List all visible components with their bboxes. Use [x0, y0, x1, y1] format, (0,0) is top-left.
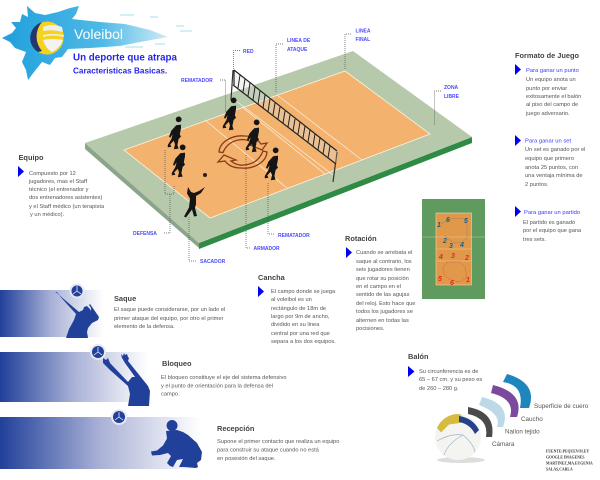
panel: rotación: sentido de las agujas — [356, 292, 410, 298]
rotation diagram: 1 — [466, 277, 470, 284]
panel: formato de juego: Un set es ganado por el — [525, 147, 585, 153]
panel: cancha — [258, 273, 336, 345]
panel: saque: primer ataque del equipo, por otro el primer — [114, 316, 223, 322]
panel: formato de juego: tres sets. — [523, 237, 546, 243]
rotation diagram: 3 — [449, 243, 453, 250]
panel: rotación: que rotar su posición — [356, 276, 409, 282]
rotation diagram: 6 — [450, 280, 454, 287]
panel: formato de juego: Para ganar un punto — [526, 68, 579, 74]
panel: rotación: alternen en todas las — [356, 318, 409, 324]
rotation diagram: 6 — [446, 217, 450, 224]
ball in air — [203, 173, 207, 177]
panel: equipo: y el Staff médico (un terapista — [29, 204, 105, 210]
panel: balón: Su circunferencia es de — [419, 369, 478, 375]
panel: rotación: todos los jugadores se — [356, 309, 413, 315]
rotation diagram: 2 — [442, 238, 447, 245]
panel: formato de juego: equipo que primero — [525, 156, 574, 162]
panel: recepción: para construir su ataque cuando no está — [217, 448, 320, 454]
panel: formato de juego: juego adversario. — [525, 111, 570, 117]
panel: cancha: rectángulo de 18m de — [271, 306, 326, 312]
source credits: MARTINEZ,MA.EUGENIA — [546, 462, 593, 466]
rotation diagram: 4 — [459, 242, 464, 249]
panel: formato de juego: punto por enviar — [526, 86, 567, 92]
panel: recepción: Recepción — [217, 424, 255, 433]
panel: saque: elemento de la defensa. — [114, 324, 175, 330]
ball diagram: Nailon tejido — [505, 428, 540, 436]
panel: saque: El saque puede considerarse, por un lado el — [114, 307, 225, 313]
paint splash — [2, 6, 168, 80]
ball diagram — [435, 374, 589, 463]
title: Voleibol — [74, 26, 123, 42]
net — [231, 70, 337, 182]
panel: formato de juego: exitosamente el balón — [526, 94, 581, 100]
source credits: GOOGLE IMAGENES — [546, 456, 585, 460]
panel: rotación: en el campo en el — [356, 284, 401, 290]
rotation diagram: 3 — [451, 253, 455, 260]
rotation diagram: 4 — [438, 254, 443, 261]
panel: saque — [0, 284, 225, 338]
panel: equipo: Equipo — [18, 153, 44, 162]
panel: bloqueo: campo. — [161, 392, 180, 398]
player: server — [184, 187, 205, 218]
panel: rotación: seis jugadores tienen — [356, 267, 410, 273]
panel: formato de juego: Formato de Juego — [515, 51, 580, 60]
panel: formato de juego: al piso del campo de — [526, 102, 578, 108]
panel: recepción — [0, 409, 339, 469]
panel: cancha: separa a los dos equipos. — [271, 339, 336, 345]
panel: rotación: Rotación — [345, 234, 377, 243]
ball diagram: Superficie de cuero — [534, 403, 589, 410]
court labels — [133, 28, 460, 265]
panel: rotación: pocisiones. — [356, 326, 385, 332]
panel: cancha: El campo donde se juega — [271, 289, 336, 295]
panel: equipo: dos entrenadores asistentes) — [29, 195, 102, 201]
panel: rotación: Cuando se arrebata el — [356, 250, 412, 256]
court labels: SACADOR — [200, 259, 226, 265]
panel: cancha: dividido en su linea — [271, 322, 320, 328]
panel: cancha: al voleibol es un — [271, 297, 312, 303]
panel: balón — [408, 352, 482, 392]
panel: recepción: en posesión del saque. — [217, 456, 276, 462]
panel: saque: Saque — [114, 294, 136, 303]
panel: equipo: y un médico). — [30, 212, 65, 218]
panel: rotación — [345, 234, 415, 332]
source credits — [546, 450, 593, 472]
panel: equipo: Compuesto por 12 — [29, 171, 76, 177]
panel: cancha: largo por 9m de ancho, — [271, 314, 330, 320]
players — [168, 97, 279, 218]
panel: bloqueo: Bloqueo — [162, 359, 192, 368]
icon: volleyball — [30, 21, 64, 55]
subtitle: Un deporte que atrapa — [73, 52, 178, 64]
panel: recepción: Supone el primer contacto que realiza un equipo — [217, 439, 339, 445]
source credits: SALAS,CARLA — [546, 468, 573, 472]
rotation diagram: 2 — [464, 255, 469, 262]
court labels: ATAQUE — [287, 47, 308, 53]
source credits: FUENTE:PEQUEVOLEY — [546, 450, 589, 454]
court labels: REMATADOR — [181, 78, 213, 84]
panel: balón: 65 – 67 cm. y su peso es — [419, 377, 482, 383]
panel: formato de juego: una ventaja mínima de — [525, 173, 583, 179]
court labels: REMATADOR — [278, 233, 310, 239]
subtitle 2: Caracteristicas Basicas. — [73, 66, 167, 76]
panel: balón: de 260 – 280 g. — [419, 386, 459, 392]
panel: formato de juego: por el equipo que gana — [523, 228, 582, 234]
court labels: FINAL — [356, 37, 370, 43]
court labels: RED — [243, 49, 254, 55]
panel: bloqueo: El bloqueo constituye el eje del sistema defensivo — [161, 375, 287, 381]
court labels: LINEA — [356, 28, 371, 34]
panel: formato de juego: El partido es ganado — [523, 220, 575, 226]
panel: formato de juego: anota 25 puntos, con — [525, 165, 578, 171]
panel: formato de juego: Para ganar un set — [525, 138, 571, 144]
court labels: LIBRE — [444, 94, 460, 100]
rotation arrows — [218, 136, 267, 168]
panel: rotación: del reloj. Esto hace que — [356, 301, 415, 307]
panel: cancha: central por una red que — [271, 331, 330, 337]
rotation diagram — [422, 199, 485, 299]
panel: formato de juego: 2 puntos. — [525, 182, 549, 188]
panel: formato de juego: Para ganar un partido — [524, 210, 580, 216]
ball diagram: Caucho — [521, 416, 543, 423]
panel: formato de juego: Un equipo anota un — [526, 77, 576, 83]
panel: bloqueo — [0, 344, 287, 406]
ball diagram: Cámara — [492, 441, 515, 448]
header banner — [2, 6, 192, 80]
rotation diagram: 1 — [437, 222, 441, 229]
panel: rotación: saque al contrario, los — [356, 259, 412, 265]
panel: balón: Balón — [408, 352, 429, 361]
rotation diagram: 5 — [438, 276, 442, 283]
panel: equipo: jugadores, mas el Staff — [28, 179, 87, 185]
court labels: ZONA — [444, 85, 459, 91]
panel: bloqueo: y el punto de orientación para la defensa del — [161, 384, 273, 390]
rotation diagram: 5 — [464, 218, 468, 225]
volleyball court — [85, 51, 472, 249]
court labels: LINEA DE — [287, 38, 311, 44]
court labels: ARMADOR — [254, 246, 280, 252]
panel: formato de juego — [515, 51, 585, 243]
court labels: DEFENSA — [133, 231, 157, 237]
panel: equipo: técnico (el entrenador y — [29, 187, 89, 193]
panel: cancha: Cancha — [258, 273, 286, 282]
panel: equipo — [18, 153, 105, 218]
